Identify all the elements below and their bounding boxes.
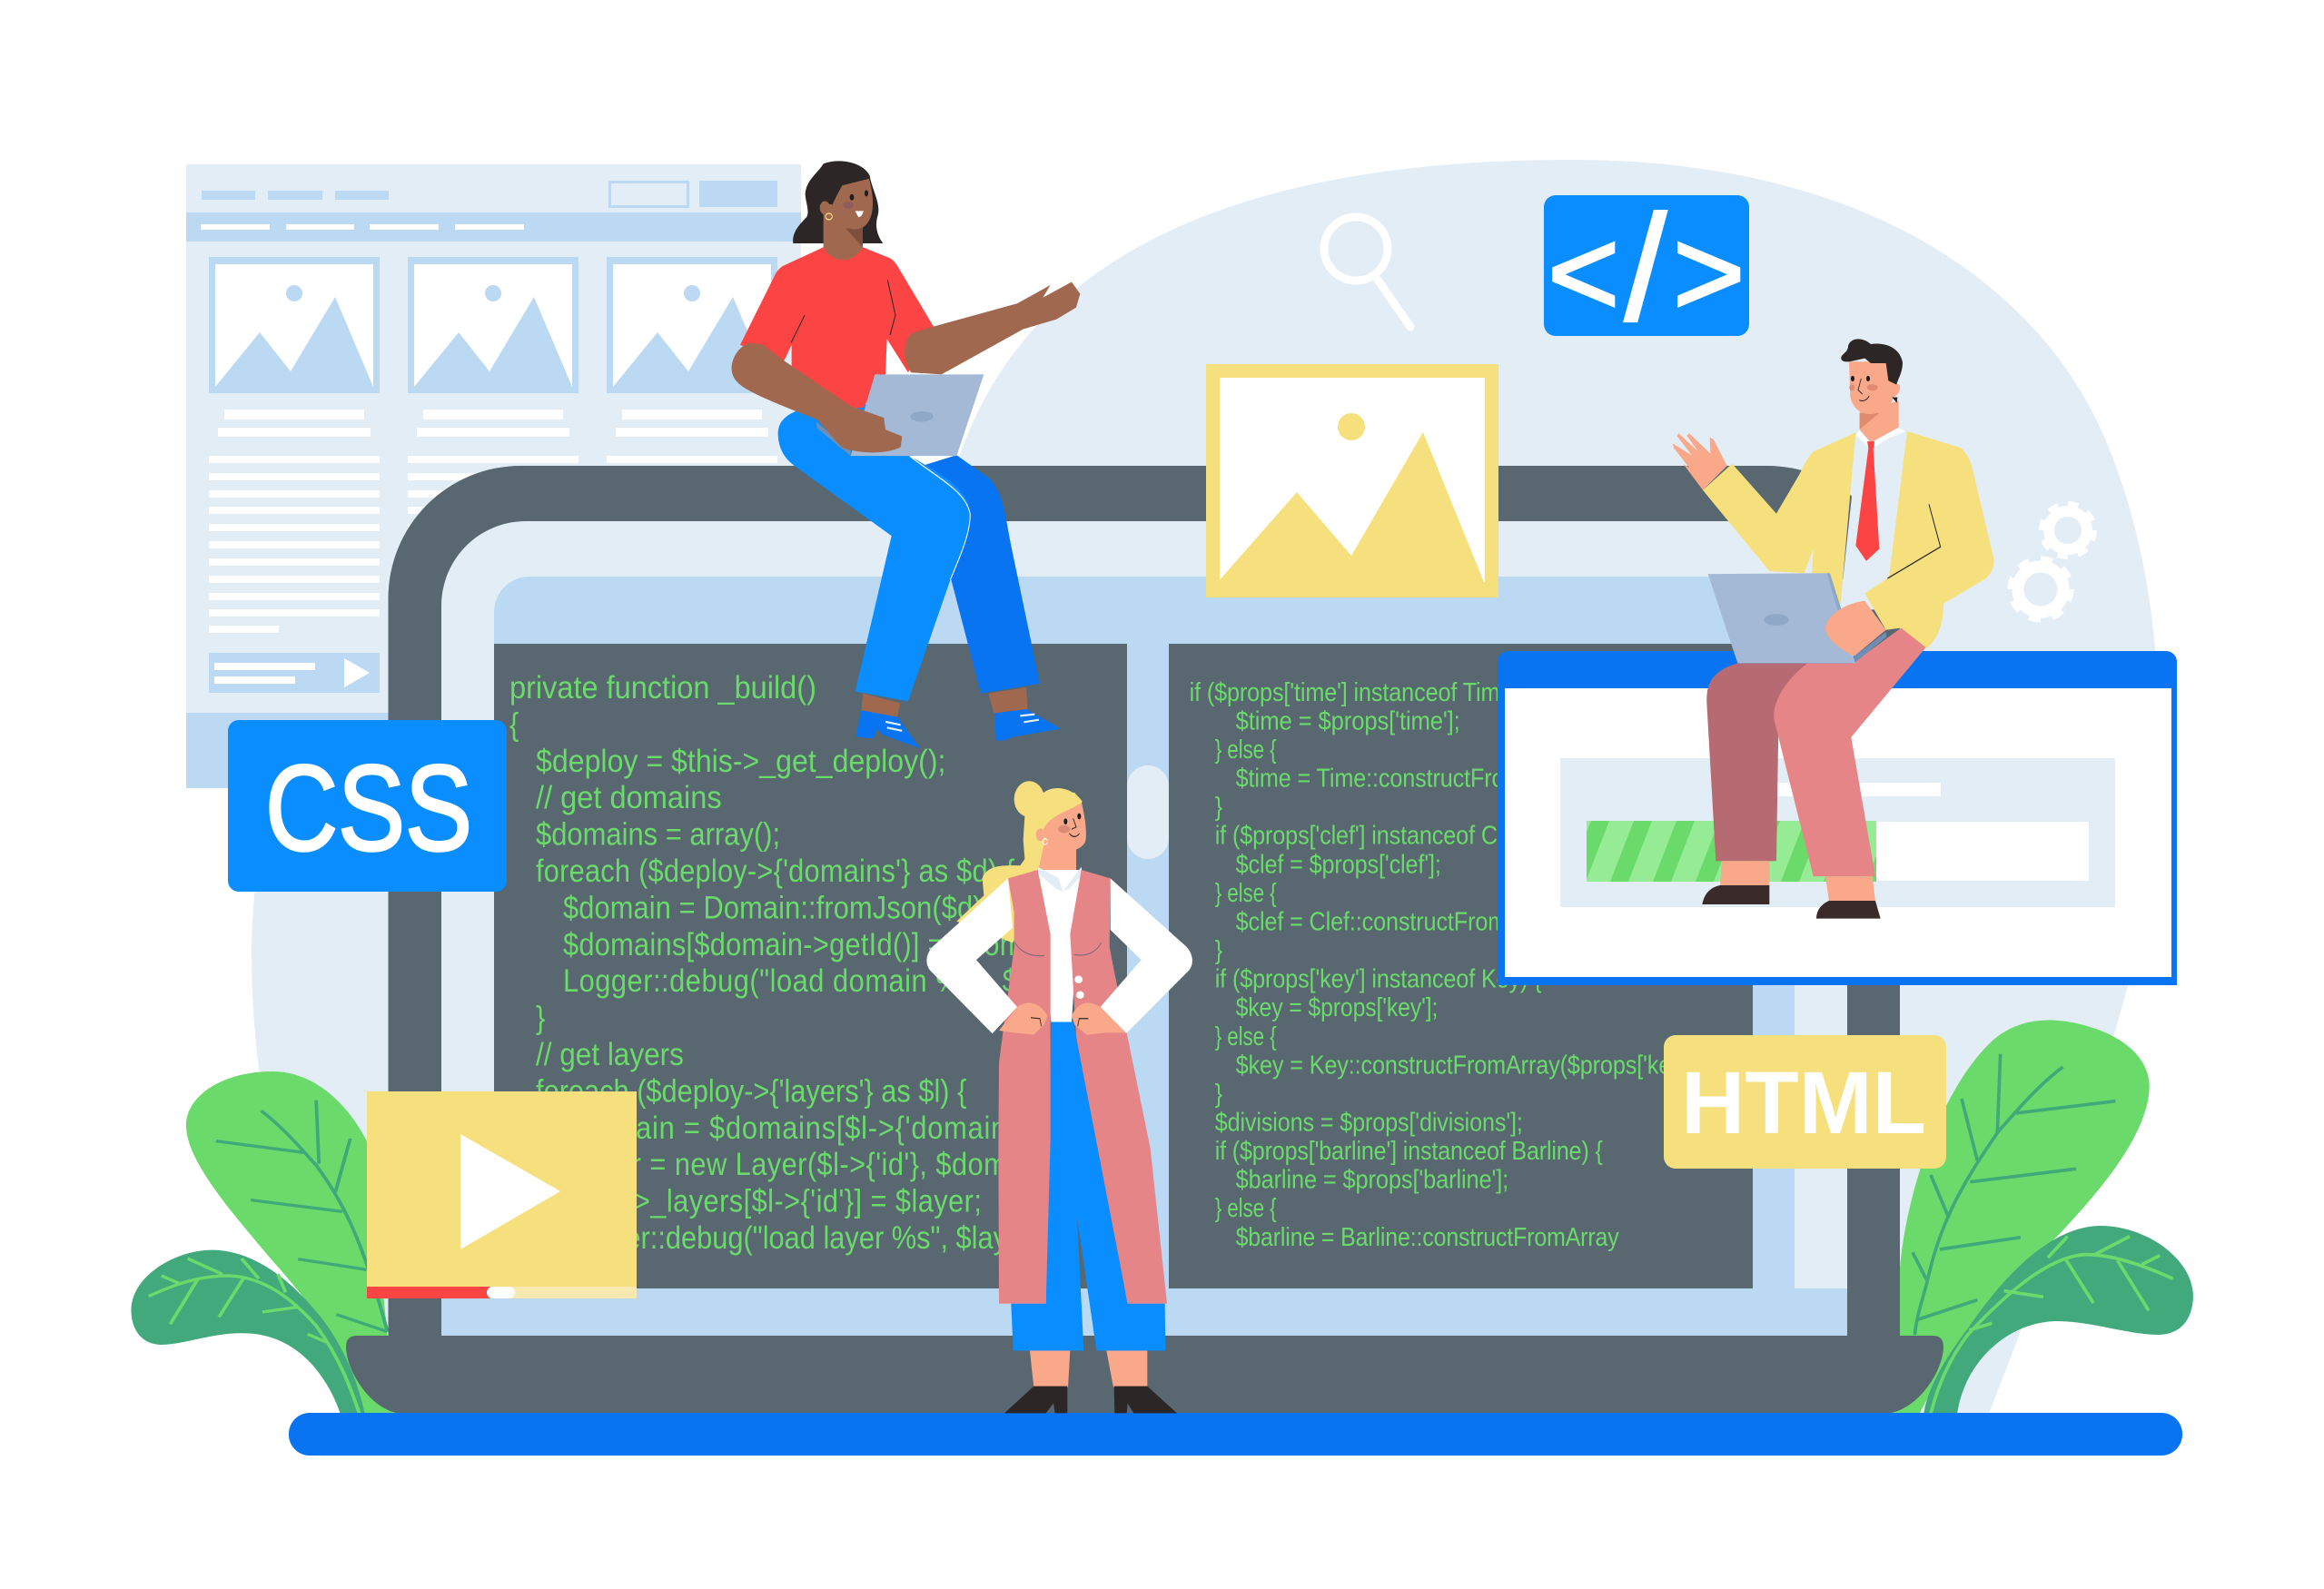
icon: code tag (1544, 184, 1749, 351)
badge: CSS: CSS (265, 741, 472, 876)
video player card (367, 1091, 637, 1298)
code block: right panel: $clef = Clef::constructFromArray($props['clef']); (1236, 906, 1707, 936)
code block: left panel: Logger::debug("load domain %s", $d); (563, 962, 1053, 998)
code block: left panel: $domain = Domain::fromJson($d); (563, 890, 990, 925)
code block: left panel: { (509, 706, 519, 742)
panel: website wireframe (186, 164, 801, 788)
icon: gears (2012, 505, 2093, 618)
code block: right panel: if ($props['clef'] instanceof Clef) { (1215, 820, 1543, 850)
code block: right panel (1191, 681, 1664, 1251)
code block: right panel: $key = $props['key']; (1236, 992, 1438, 1022)
code block: left panel: Logger::debug("load layer %s", $layer); (563, 1219, 1049, 1255)
code block: right panel: $clef = $props['clef']; (1236, 849, 1441, 879)
code block: left panel: foreach ($deploy->{'layers'} as $l) { (536, 1073, 966, 1109)
code block: right panel: $barline = $props['barline']; (1236, 1164, 1508, 1194)
code block: right panel: } (1215, 934, 1222, 964)
code block: left panel (510, 676, 1014, 1255)
code block: right panel: } (1215, 791, 1222, 822)
ground bar (289, 1413, 2182, 1456)
icon: code tag: / (1625, 184, 1666, 351)
person: standing woman (926, 781, 1192, 1413)
code block: right panel: $barline = Barline::constructFromArray (1236, 1221, 1619, 1251)
code block: right panel: } (1215, 1078, 1222, 1108)
plant: left (131, 1071, 407, 1414)
window: progress (1498, 651, 2177, 985)
code block: right panel: if ($props['barline'] instanceof Barline) { (1215, 1135, 1603, 1166)
code block: right panel: if ($props['key'] instanceof Key) { (1215, 963, 1542, 993)
code block: right panel: $time = Time::constructFromArray($props['time']); (1236, 763, 1732, 793)
code block: right panel: } else { (1215, 1193, 1277, 1223)
badge: CSS (228, 720, 507, 892)
code block: left panel: } (536, 1000, 545, 1035)
code block: left panel: $domains = array(); (536, 816, 780, 852)
code block: right panel: $divisions = $props['divisions']; (1215, 1107, 1523, 1137)
code block: left panel: // get layers (536, 1036, 684, 1071)
code block: left panel: $domain = $domains[$l->{'domain'}]; (563, 1110, 1041, 1145)
code block: right panel: if ($props['time'] instanceof Time) { (1190, 676, 1534, 706)
code block: left panel: $domains[$domain->getId()] = $domain; (563, 926, 1069, 962)
person: seated woman with laptop (732, 161, 1080, 748)
code block: left panel: // get domains (536, 779, 722, 814)
code block: right panel: } else { (1215, 1021, 1277, 1051)
laptop screen (389, 466, 1900, 1344)
icon: magnifier (1324, 217, 1410, 327)
plant: right (1892, 1020, 2193, 1414)
icon: code tag: > (1673, 203, 1745, 341)
code block: right panel: } else { (1215, 734, 1277, 764)
badge: HTML (1664, 1035, 1946, 1169)
code block: left panel: foreach ($deploy->{'domains'} as $d) { (536, 853, 1015, 888)
code block: left panel: $this->_layers[$l->{'id'}] = $layer; (563, 1183, 982, 1219)
background blob (252, 160, 2160, 1413)
person: seated man with laptop (1673, 339, 1993, 919)
code block: right panel: $time = $props['time']; (1236, 706, 1460, 735)
image card: yellow (1206, 364, 1498, 597)
code block: left panel: private function _build() (509, 669, 816, 705)
badge: HTML: HTML (1681, 1053, 1926, 1152)
code block: right panel: } else { (1215, 877, 1277, 907)
code block: left panel: $layer = new Layer($l->{'id'}, $domain); (563, 1146, 1063, 1181)
laptop base (346, 1336, 1943, 1414)
code block: left panel: $deploy = $this->_get_deploy(); (536, 743, 945, 778)
icon: code tag: < (1548, 203, 1619, 341)
code block: right panel: $key = Key::constructFromArray($props['key']); (1236, 1050, 1706, 1080)
